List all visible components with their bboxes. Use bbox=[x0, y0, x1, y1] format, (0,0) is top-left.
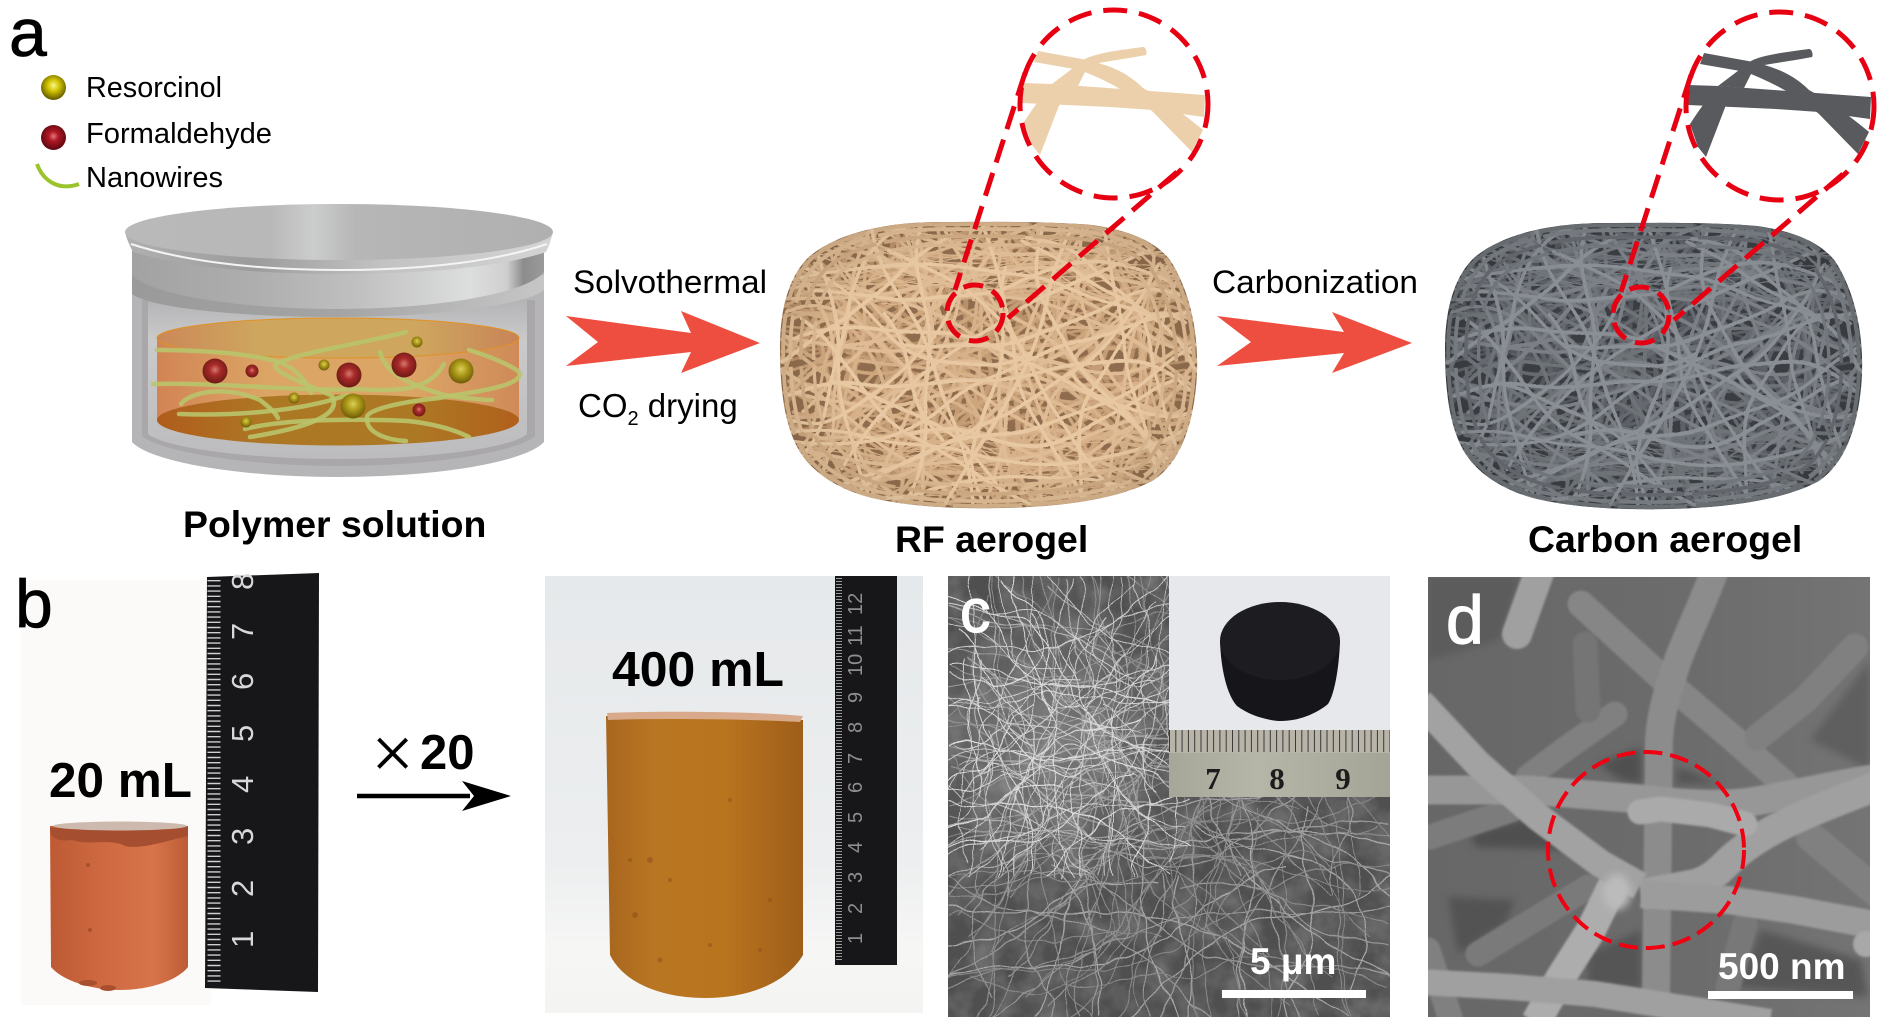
SEM c: fibres bbox=[918, 575, 1390, 1018]
dish: lid rim bbox=[125, 232, 553, 274]
dish: lid top bbox=[125, 204, 553, 260]
RF aerogel: fibre mesh bbox=[782, 222, 1198, 509]
carbon magnifier circle bbox=[1686, 12, 1874, 200]
label: 20 mL: 20 mL bbox=[49, 754, 192, 808]
black arrow bbox=[357, 781, 511, 811]
ruler: 20 mL: 5 bbox=[225, 725, 260, 742]
carbon aerogel bundle bbox=[1442, 218, 1868, 513]
panel label: c: c bbox=[960, 577, 990, 645]
dish: liquid surface bbox=[157, 318, 519, 358]
carbon magnified view bbox=[1613, 12, 1874, 343]
ruler: 400 mL: 1 bbox=[845, 933, 867, 944]
co2 drying label: CO bbox=[578, 387, 628, 424]
SEM d: right lower fibre bbox=[1641, 894, 1880, 926]
SEM d: horizontal fibre bbox=[1420, 778, 1880, 804]
legend: formaldehyde sphere bbox=[41, 125, 66, 150]
ruler: 400 mL: 10 bbox=[845, 654, 867, 676]
inset ruler: 9 bbox=[1335, 761, 1351, 796]
dish: glass body bbox=[132, 270, 544, 477]
ruler: 400 mL: 9 bbox=[845, 692, 867, 703]
SEM d: top-left stub bbox=[1517, 570, 1540, 634]
ruler: 400 mL: 8 bbox=[845, 722, 867, 733]
panel label: d: d bbox=[1446, 582, 1484, 658]
carbon selection ellipse bbox=[1613, 287, 1669, 343]
dish: inner strip bbox=[142, 300, 535, 466]
polymer solution title: Polymer solution bbox=[183, 503, 486, 545]
dish: liquid bottom bbox=[157, 394, 519, 446]
red arrow: solvothermal bbox=[566, 311, 760, 373]
SEM d: dark shadow patches bbox=[1428, 577, 1870, 997]
ruler: 20 mL: 1 bbox=[225, 931, 260, 948]
legend: nanowires label: Nanowires bbox=[86, 162, 223, 194]
inset photo background bbox=[1169, 576, 1390, 730]
panel b bbox=[21, 573, 923, 1013]
dish: inner wall bbox=[148, 300, 527, 459]
ruler: 400 mL: 3 bbox=[845, 872, 867, 883]
RF magnified fibres bbox=[1022, 47, 1205, 155]
ruler: 20 mL: 2 bbox=[225, 880, 260, 897]
carbon callout dashed lines bbox=[1621, 75, 1843, 320]
inset ruler bbox=[1169, 730, 1390, 797]
SEM d: vertical fibre bbox=[1656, 570, 1715, 1000]
RF aerogel title: RF aerogel bbox=[895, 518, 1088, 560]
ruler: 400 mL: 7 bbox=[845, 753, 867, 764]
SEM d: right branch bbox=[1641, 785, 1880, 894]
polymer solution dish bbox=[125, 204, 553, 477]
legend: formaldehyde label: Formaldehyde bbox=[86, 118, 272, 150]
RF magnified view bbox=[947, 10, 1208, 341]
RF callout dashed lines bbox=[955, 73, 1177, 318]
dish: reactant spheres bbox=[202, 336, 474, 428]
ruler: 20 mL: 6 bbox=[225, 673, 260, 690]
dish: liquid side bbox=[157, 338, 519, 445]
RF selection ellipse bbox=[947, 285, 1003, 341]
cylinder: 20 mL bbox=[50, 822, 188, 991]
dish: rim highlight bbox=[131, 244, 547, 270]
SEM d: background bbox=[1428, 577, 1870, 1017]
co2 drying label: 2 bbox=[628, 408, 639, 430]
ruler: 400 mL: 11 bbox=[845, 625, 867, 646]
dish: nanowires bbox=[153, 332, 520, 441]
selection ellipse d bbox=[1548, 752, 1744, 948]
SEM c: background bbox=[948, 576, 1390, 1017]
panel label: b: b bbox=[15, 566, 53, 642]
legend: resorcinol sphere bbox=[41, 75, 66, 100]
solvothermal label: Solvothermal bbox=[573, 264, 767, 300]
ruler: 400 mL: 2 bbox=[845, 903, 867, 914]
legend: nanowire stroke bbox=[37, 164, 79, 186]
label: 400 mL: 400 mL bbox=[612, 643, 784, 697]
ruler: 20 mL bbox=[205, 573, 319, 992]
scale label: 500 nm: 500 nm bbox=[1718, 946, 1846, 987]
co2 drying label: drying bbox=[639, 387, 738, 424]
RF aerogel: edge shading bbox=[777, 217, 1203, 512]
SEM d: fibres bbox=[1420, 570, 1880, 1022]
ruler: 400 mL: 6 bbox=[845, 782, 867, 793]
carbon magnified fibres bbox=[1688, 49, 1871, 157]
cylinder: 400 mL bbox=[606, 712, 803, 998]
RF aerogel: base bbox=[777, 217, 1203, 512]
RF magnifier circle bbox=[1020, 10, 1208, 198]
RF aerogel bundle bbox=[777, 217, 1203, 512]
SEM d: blurred background fibres bbox=[1428, 604, 1880, 1017]
legend: resorcinol label: Resorcinol bbox=[86, 72, 222, 104]
scale bar d bbox=[1708, 991, 1853, 999]
scale bar c bbox=[1222, 990, 1366, 998]
SEM d: stub over horizontal bbox=[1640, 809, 1745, 824]
ruler: 400 mL: 5 bbox=[845, 812, 867, 823]
SEM d: edge fibre end bbox=[1852, 932, 1870, 958]
SEM d: main diagonal fibre bbox=[1420, 702, 1640, 886]
inset ruler: 8 bbox=[1269, 761, 1285, 796]
ruler: 20 mL: 8 bbox=[225, 573, 260, 590]
carbon aerogel: edge shading bbox=[1454, 229, 1845, 501]
carbon aerogel: wrapping rim fibres bbox=[1448, 225, 1859, 507]
panel c: SEM image bbox=[918, 575, 1390, 1018]
panel d: SEM image bbox=[1420, 570, 1880, 1022]
multiplier: ×20: × bbox=[371, 711, 414, 794]
SEM d: junction highlight bbox=[1603, 874, 1631, 910]
SEM c: mottled texture bbox=[948, 576, 1390, 1017]
carbon aerogel: base bbox=[1442, 218, 1868, 513]
legend bbox=[37, 72, 272, 194]
inset ruler: 7 bbox=[1205, 761, 1221, 796]
carbon aerogel title: Carbon aerogel bbox=[1528, 518, 1802, 560]
red arrow: carbonization bbox=[1217, 312, 1412, 373]
SEM d: bottom fibre bbox=[1420, 982, 1770, 1022]
SEM d: bright lower branch bbox=[1536, 885, 1613, 1022]
multiplier: ×20: 20 bbox=[420, 726, 475, 780]
carbon aerogel: fibre mesh bbox=[1447, 223, 1863, 510]
dish: band lower strip bbox=[132, 275, 544, 317]
ruler: 400 mL: 4 bbox=[845, 842, 867, 853]
carbonization label: Carbonization bbox=[1212, 264, 1418, 300]
RF aerogel: wrapping rim fibres bbox=[783, 224, 1194, 506]
scale label: 5 μm: 5 μm bbox=[1250, 941, 1336, 982]
ruler: 20 mL: 7 bbox=[225, 623, 260, 640]
photo: 400 mL background bbox=[545, 576, 923, 1013]
ruler: 20 mL: 3 bbox=[225, 828, 260, 845]
multiplier: ×20 bbox=[371, 711, 475, 794]
inset black cylinder bbox=[1220, 602, 1340, 721]
dish: lid band bbox=[132, 245, 544, 309]
ruler: 400 mL bbox=[835, 576, 897, 965]
ruler: 400 mL: 12 bbox=[845, 593, 867, 615]
ruler: 20 mL: 4 bbox=[225, 776, 260, 793]
photo: 20 mL background bbox=[21, 580, 211, 1005]
